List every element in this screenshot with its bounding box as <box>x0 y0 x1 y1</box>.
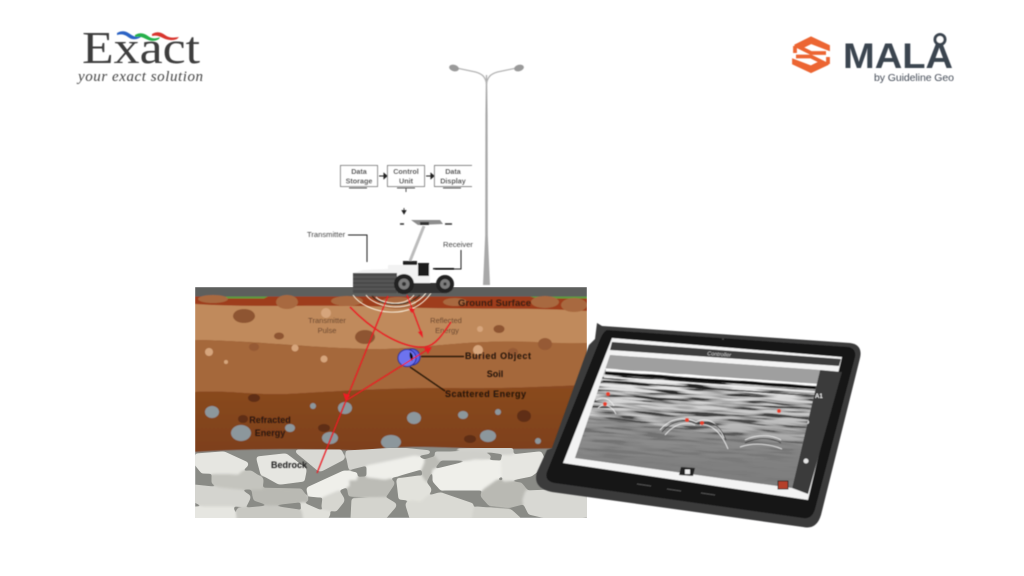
label: Transmitter: Transmitter <box>307 230 346 239</box>
panel: ground cross-section: Transmitter <box>308 316 346 325</box>
logo: Exact: Exact <box>82 23 201 73</box>
red energy rays <box>317 295 451 473</box>
panel: ground cross-section: Energy <box>435 326 459 335</box>
box: Control Unit: Control <box>393 167 419 176</box>
arrow: control to display <box>426 174 434 178</box>
lamp post <box>448 64 525 285</box>
logo: MALA: by Guideline Geo <box>874 72 954 84</box>
logo: MALA: MALA <box>843 37 953 76</box>
tablet device: A1 <box>815 394 823 400</box>
panel: ground cross-section: Pulse <box>318 326 336 335</box>
block diagram: data flow <box>340 166 472 192</box>
box: Data Storage: Storage <box>346 176 372 186</box>
panel: ground cross-section <box>193 287 590 520</box>
wave pulses <box>353 293 431 312</box>
bottom buttons <box>679 467 695 476</box>
radargram <box>574 354 820 488</box>
surface stones <box>198 295 587 312</box>
wheels <box>394 274 414 294</box>
label: Transmitter <box>307 230 367 262</box>
panel: ground cross-section: Soil <box>487 369 503 379</box>
logo: MALA <box>794 34 954 84</box>
bedrock stones <box>193 448 590 520</box>
panel: ground cross-section: Reflected <box>430 316 462 325</box>
hardware keys <box>637 484 715 495</box>
panel: ground cross-section: Buried Object <box>465 351 531 361</box>
red markers <box>603 392 781 425</box>
box: Control Unit <box>388 166 424 192</box>
box: Data Storage: Data <box>351 167 368 176</box>
label: Receiver: Receiver <box>443 240 473 249</box>
logo: Exact <box>76 23 203 85</box>
bedrock base <box>195 447 587 518</box>
side bar <box>792 370 842 494</box>
pointers <box>410 356 464 391</box>
logo: Exact: your exact solution <box>76 69 203 85</box>
box: Control Unit: Unit <box>399 176 414 186</box>
box: Data Display <box>434 166 472 188</box>
panel: ground cross-section: Refracted <box>249 415 291 425</box>
screen title: Controller <box>707 351 732 359</box>
buried object <box>404 349 420 365</box>
box: Data Display: Display <box>440 176 466 186</box>
panel: ground cross-section: Bedrock <box>271 460 308 470</box>
panel: ground cross-section: Scattered Energy <box>445 389 526 399</box>
box: Data Storage <box>340 166 378 188</box>
tablet body <box>536 323 861 528</box>
label: Receiver <box>435 240 473 269</box>
box: Data Display: Data <box>445 167 462 176</box>
arrow: storage to control <box>379 174 387 178</box>
tablet device <box>536 323 861 528</box>
tablet screen <box>563 338 842 500</box>
panel: ground cross-section: Energy <box>255 428 285 438</box>
surface band <box>195 287 587 296</box>
soil pebbles <box>233 309 552 443</box>
rover: GPR cart <box>353 208 454 294</box>
grey stones <box>205 402 541 449</box>
icon: MALA hexagon <box>794 38 828 71</box>
soil layers <box>196 340 585 395</box>
soil labels: Ground Surface <box>458 298 531 309</box>
